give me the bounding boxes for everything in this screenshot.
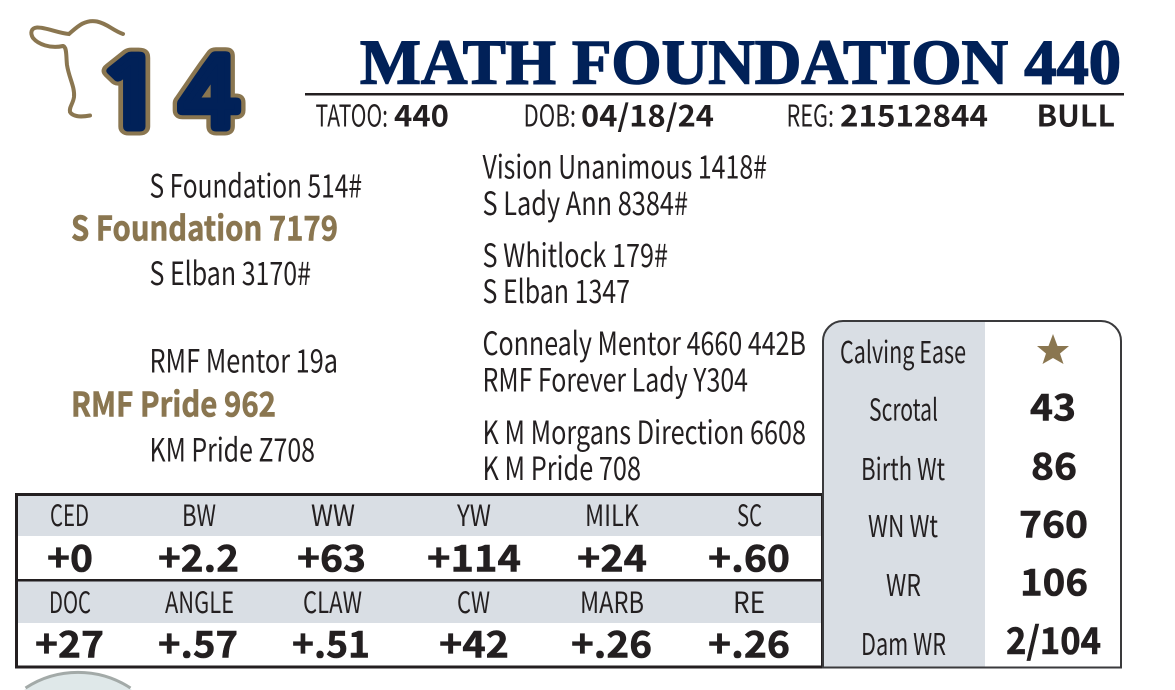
EPD row 1 values: +114 bbox=[427, 528, 521, 582]
EPD row 2 labels: DOC bbox=[49, 580, 91, 622]
pedigree: sire side: S Foundation 7179 bbox=[71, 202, 338, 250]
registration details row bbox=[316, 92, 1115, 136]
panel: EPD table bbox=[16, 493, 822, 668]
performance labels bbox=[840, 328, 966, 664]
pedigree: great-grandparents: K M Pride 708 bbox=[482, 444, 641, 490]
pedigree: great-grandparents: RMF Forever Lady Y304 bbox=[482, 356, 748, 402]
performance labels: WR bbox=[886, 561, 921, 605]
EPD row 1 values bbox=[47, 528, 790, 582]
title rule bbox=[305, 93, 1124, 96]
performance values: 43 bbox=[1030, 378, 1076, 432]
registration details row: BULL bbox=[1036, 92, 1115, 136]
performance labels: Calving Ease bbox=[840, 328, 966, 372]
EPD row 1 labels: YW bbox=[456, 493, 491, 535]
cropped circular badge at bottom edge bbox=[24, 672, 132, 690]
EPD row 1 values: +.60 bbox=[708, 528, 790, 582]
pedigree: dam side bbox=[71, 336, 338, 472]
registration details row: 21512844 bbox=[840, 92, 988, 136]
performance values: 106 bbox=[1020, 552, 1088, 606]
EPD row 2 values: +.57 bbox=[158, 614, 238, 668]
title: MATH FOUNDATION 440 bbox=[360, 28, 1121, 98]
lot number 14: 4 bbox=[178, 47, 240, 142]
EPD row 1 values: +24 bbox=[577, 528, 647, 582]
icon: calving ease star bbox=[1037, 334, 1069, 364]
performance labels: Scrotal bbox=[869, 386, 938, 430]
lot number 14: 1 bbox=[98, 47, 166, 142]
registration details row: 04/18/24 bbox=[581, 92, 714, 136]
pedigree: great-grandparents: Connealy Mentor 4660 442B bbox=[482, 319, 806, 365]
EPD row 1 labels: SC bbox=[737, 493, 762, 535]
registration details row: DOB: bbox=[524, 92, 576, 136]
pedigree: great-grandparents: S Whitlock 179# bbox=[482, 231, 668, 277]
pedigree: great-grandparents: Vision Unanimous 1418# bbox=[482, 142, 767, 188]
performance values: 2/104 bbox=[1006, 611, 1101, 665]
pedigree: dam side: RMF Mentor 19a bbox=[150, 336, 338, 382]
EPD row 2 values: +.26 bbox=[708, 614, 790, 668]
panel: performance data bbox=[823, 321, 1121, 668]
EPD row 1 labels bbox=[50, 493, 762, 535]
registration details row: TATOO: bbox=[316, 92, 388, 136]
pedigree: great-grandparents: K M Morgans Direction 6608 bbox=[482, 408, 806, 454]
EPD row 2 labels bbox=[49, 580, 765, 622]
lot number 14: 4 bbox=[178, 47, 240, 142]
performance values: 760 bbox=[1019, 494, 1088, 548]
EPD row 2 labels: RE bbox=[733, 580, 765, 622]
EPD row 2 labels: CLAW bbox=[303, 580, 362, 622]
lot number 14: 1 bbox=[98, 47, 166, 142]
EPD row 2 labels: MARB bbox=[580, 580, 644, 622]
EPD row 1 labels: CED bbox=[50, 493, 89, 535]
registration details row: 440 bbox=[394, 92, 449, 136]
performance values bbox=[1006, 378, 1101, 665]
pedigree: sire side: S Foundation 514# bbox=[150, 162, 362, 208]
lot number 14 bbox=[98, 47, 240, 142]
EPD row 2 values: +27 bbox=[35, 614, 104, 668]
EPD row 2 values: +.51 bbox=[292, 614, 370, 668]
performance values: 86 bbox=[1031, 436, 1077, 490]
pedigree: dam side: KM Pride Z708 bbox=[150, 426, 315, 472]
icon: cow head outline bbox=[31, 21, 123, 116]
EPD row 1 values: +0 bbox=[47, 528, 93, 582]
EPD row 2 values: +42 bbox=[439, 614, 509, 668]
EPD row 1 values: +2.2 bbox=[158, 528, 239, 582]
pedigree: great-grandparents: S Lady Ann 8384# bbox=[482, 179, 688, 225]
EPD row 2 labels: CW bbox=[457, 580, 490, 622]
EPD row 1 labels: BW bbox=[182, 493, 216, 535]
pedigree: dam side: RMF Pride 962 bbox=[71, 378, 276, 426]
EPD row 2 values: +.26 bbox=[571, 614, 652, 668]
performance labels: Dam WR bbox=[861, 620, 946, 664]
pedigree: sire side bbox=[71, 162, 362, 295]
pedigree: sire side: S Elban 3170# bbox=[150, 249, 311, 295]
EPD row 1 labels: MILK bbox=[585, 493, 639, 535]
EPD row 1 labels: WW bbox=[311, 493, 355, 535]
EPD row 1 values: +63 bbox=[297, 528, 366, 582]
pedigree: great-grandparents bbox=[482, 142, 806, 490]
EPD row 2 values bbox=[35, 614, 790, 668]
performance labels: WN Wt bbox=[868, 502, 938, 546]
pedigree: great-grandparents: S Elban 1347 bbox=[482, 267, 630, 313]
performance labels: Birth Wt bbox=[861, 445, 945, 489]
registration details row: REG: bbox=[786, 92, 834, 136]
EPD row 2 labels: ANGLE bbox=[165, 580, 234, 622]
